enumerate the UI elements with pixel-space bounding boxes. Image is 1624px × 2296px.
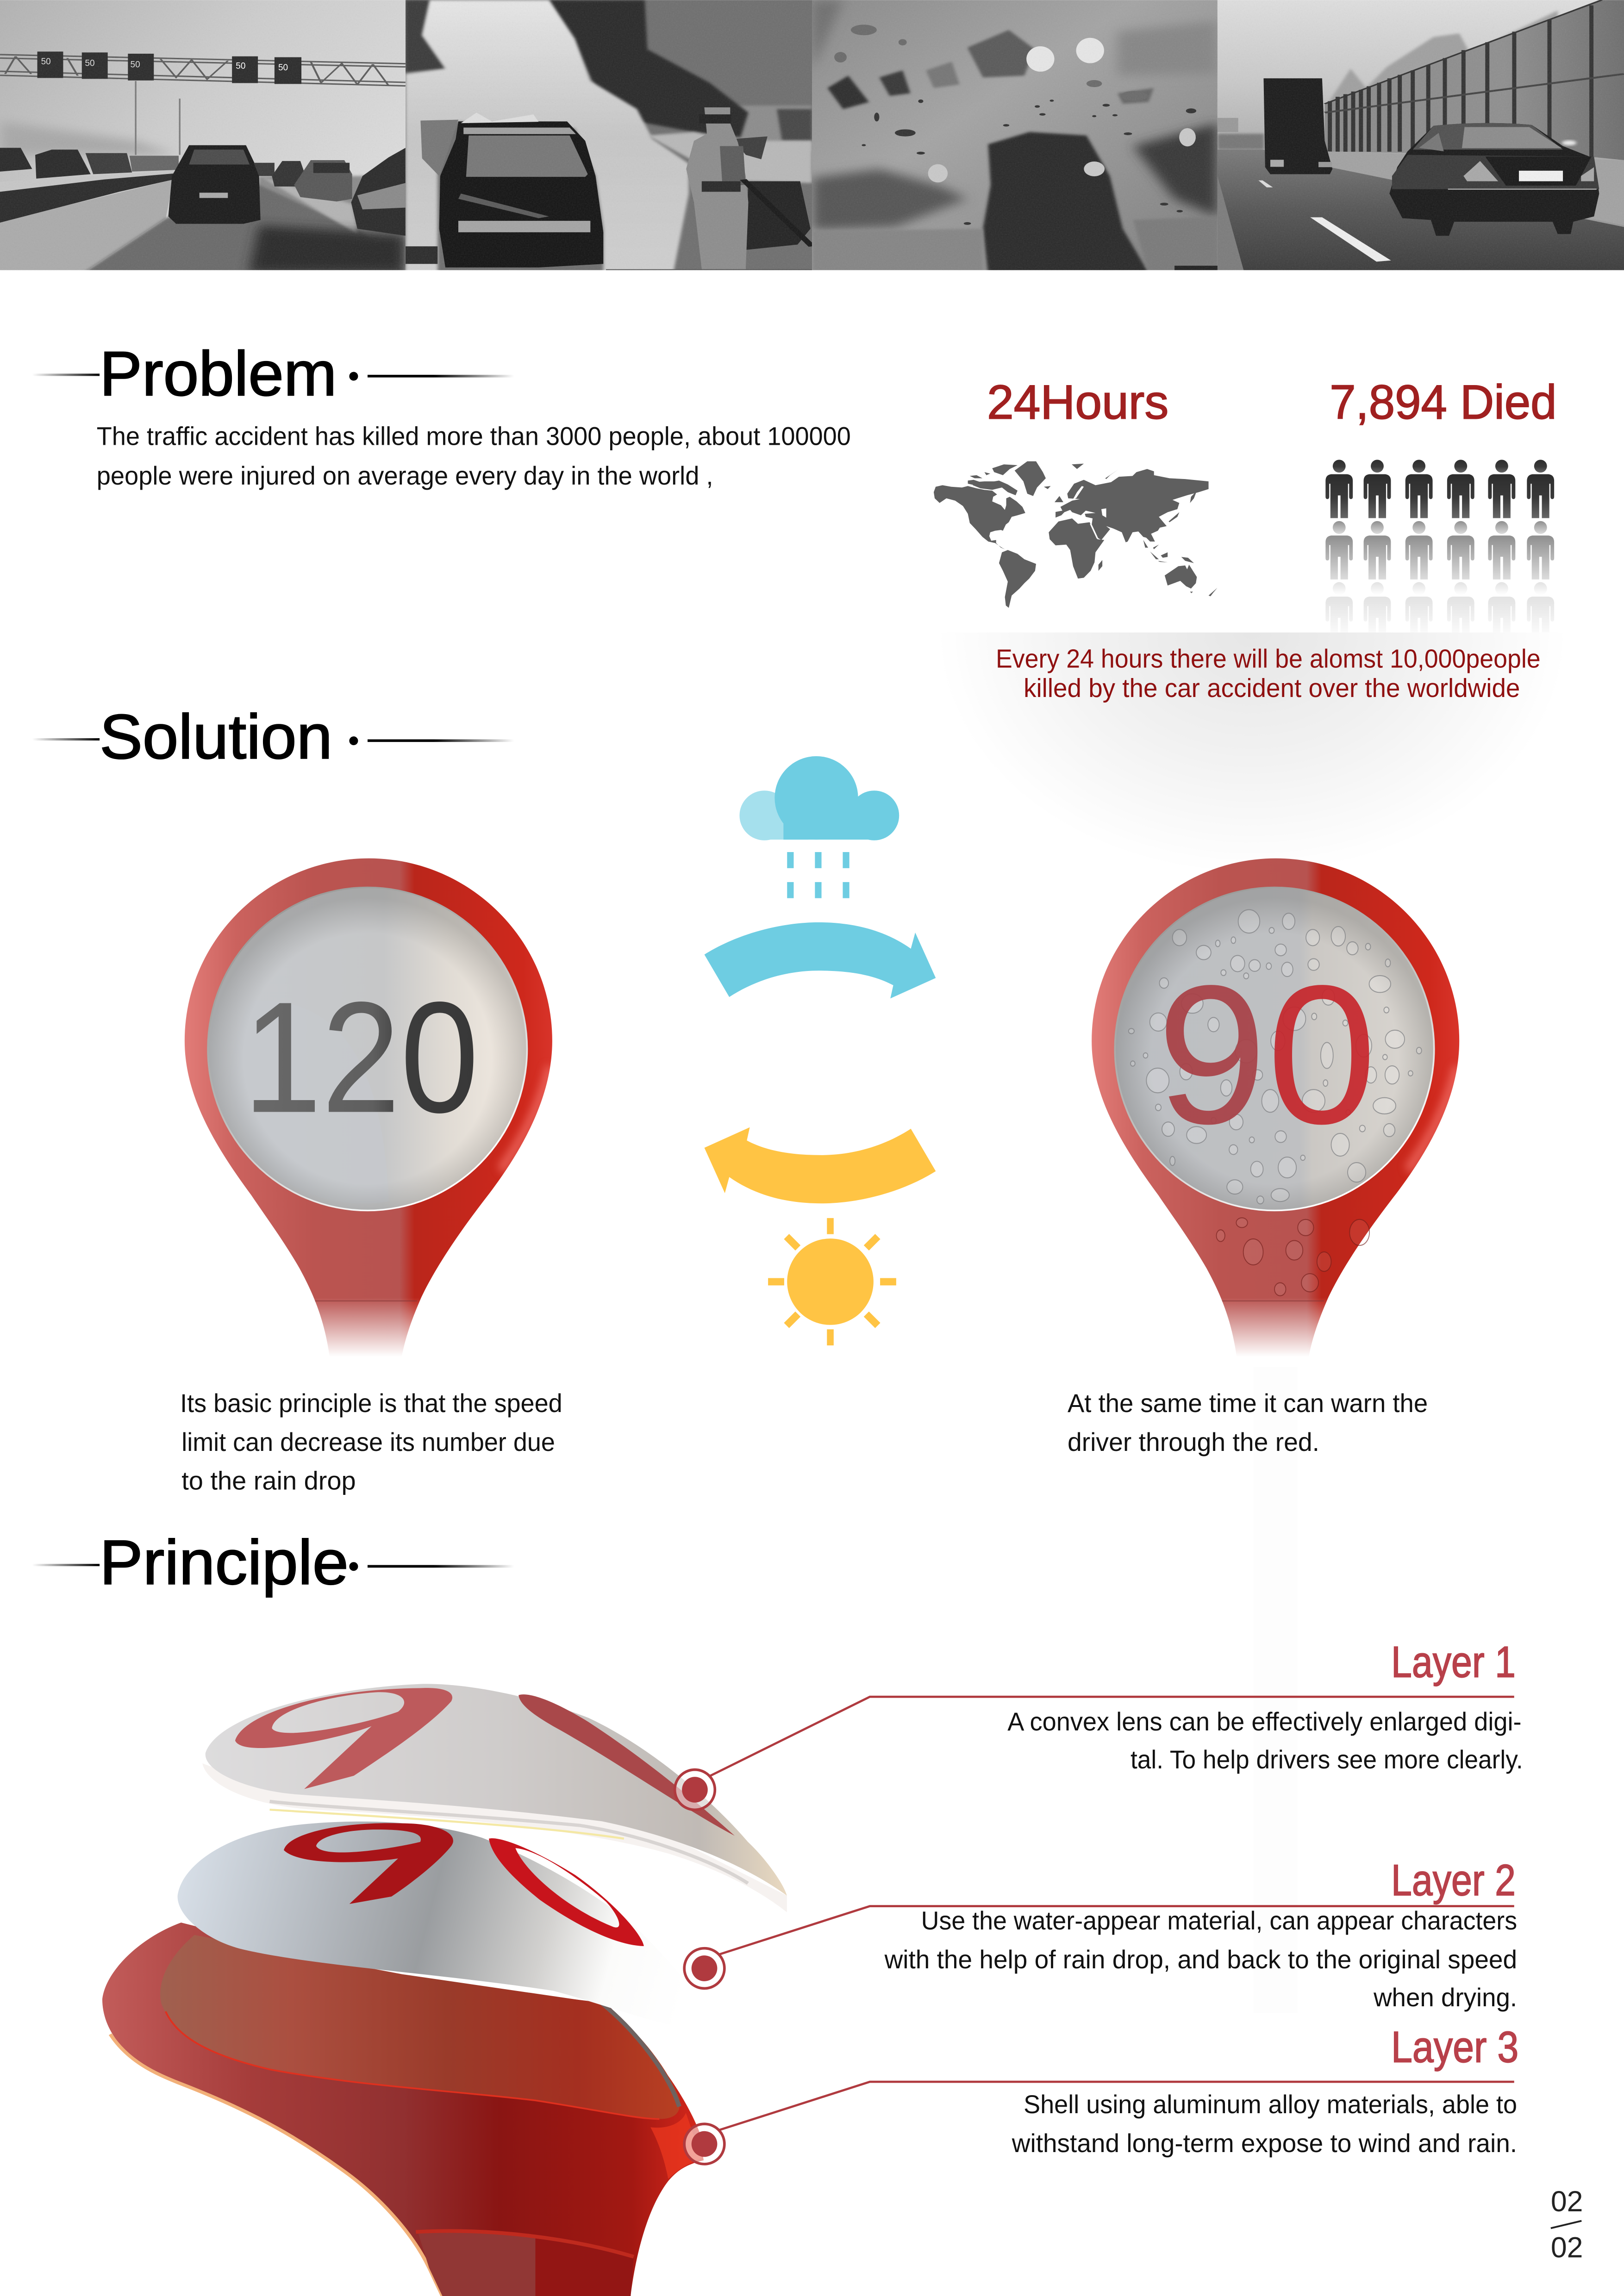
text: basic principle: Its basic principle is that the speed — [180, 1389, 562, 1418]
arrow: yellow, sun restores limit — [705, 1127, 936, 1203]
page number — [1551, 2185, 1583, 2264]
people pictogram — [1325, 460, 1554, 641]
callout: layer 3: Shell using aluminum alloy materials, able to — [1024, 2090, 1517, 2119]
gantry sign numbers: 50 — [278, 63, 288, 73]
icon: rain cloud — [739, 756, 899, 898]
callout: every 24 hours — [996, 644, 1541, 703]
gantry sign numbers: 50 — [236, 62, 245, 71]
callout: layer 2 — [684, 1856, 1517, 2012]
speed sign: 120 — [185, 859, 552, 1367]
exploded sign — [102, 1684, 787, 2296]
text: problem description: The traffic accident has killed more than 3000 people, about 100000 — [97, 422, 851, 451]
rain drops — [1129, 910, 1422, 1204]
photo strip — [0, 0, 1624, 279]
strip bottom trim — [0, 270, 1624, 279]
page number: 02 — [1551, 2185, 1583, 2218]
gantry sign numbers — [41, 57, 288, 73]
text: basic principle: limit can decrease its number due — [181, 1428, 555, 1456]
text: problem description — [97, 422, 851, 490]
heading: Principle: Principle — [100, 1527, 349, 1598]
photo: burning car and firefighter — [406, 0, 812, 273]
callout: layer 3 — [684, 2022, 1518, 2164]
text: problem description: people were injured on average every day in the world , — [97, 461, 713, 490]
photo group: rain on glass and wet road — [812, 0, 1624, 273]
stat: 7,894 Died: 7,894 Died — [1330, 376, 1556, 429]
layer 2: water-appear sheet — [178, 1822, 724, 2034]
text: warning — [1068, 1389, 1428, 1456]
gantry sign numbers: 50 — [41, 57, 51, 67]
heading: Solution — [32, 702, 514, 772]
grey shadow band — [937, 391, 1567, 874]
photo group: snowy queue and burning car — [0, 0, 812, 273]
photo: rain on windscreen — [812, 0, 1218, 273]
callout: every 24 hours: Every 24 hours there will be alomst 10,000people — [996, 644, 1541, 673]
section: problem — [32, 338, 1567, 874]
icon: sun — [768, 1218, 896, 1345]
faint pin reflection trail — [1254, 1354, 1298, 2013]
gantry sign numbers: 50 — [85, 58, 95, 68]
gantry sign numbers: 50 — [131, 60, 140, 70]
callout: layer 2: with the help of rain drop, and back to the original speed — [884, 1945, 1517, 1974]
section: solution — [32, 702, 1459, 1495]
text: warning: At the same time it can warn the — [1068, 1389, 1428, 1418]
speed sign: 90 with rain drops — [1092, 859, 1459, 1367]
arrow: blue, rain lowers limit — [705, 922, 936, 998]
photo grain — [0, 0, 1624, 270]
callout: layer 1: tal. To help drivers see more clearly. — [1131, 1745, 1523, 1774]
callout: layer 1 — [675, 1638, 1523, 1810]
heading: Problem: Problem — [100, 338, 337, 409]
photo: snowy motorway queue — [0, 0, 406, 273]
text: basic principle — [180, 1389, 562, 1495]
callout: layer 1: A convex lens can be effectively enlarged digi- — [1007, 1707, 1522, 1736]
world map — [934, 461, 1218, 608]
callout: layer 2: Use the water-appear material, can appear characters — [921, 1906, 1517, 1935]
layer 3: red shell — [102, 1923, 704, 2296]
number 120: 120 — [243, 970, 479, 1146]
callout: layer 2: Layer 2 — [1391, 1856, 1516, 1905]
heading: Problem — [32, 338, 514, 409]
callout: layer 1: Layer 1 — [1391, 1638, 1516, 1687]
number 90: 90 — [1157, 944, 1377, 1165]
callout: every 24 hours: killed by the car accident over the worldwide — [1024, 673, 1520, 703]
callout: layer 3: Layer 3 — [1391, 2022, 1518, 2072]
page number: 02 — [1551, 2232, 1583, 2264]
text: warning: driver through the red. — [1068, 1428, 1319, 1456]
drops on the red shell — [1217, 1218, 1369, 1296]
callout: layer 2: when drying. — [1373, 1983, 1517, 2012]
photo: cars on wet road — [1218, 0, 1624, 273]
callout: layer 3: withstand long-term expose to wind and rain. — [1012, 2129, 1517, 2158]
layer 1: convex lens — [202, 1684, 787, 1912]
stat: 24Hours: 24Hours — [987, 376, 1168, 429]
section: principle — [32, 1527, 1523, 2296]
heading: Solution: Solution — [100, 702, 332, 772]
text: basic principle: to the rain drop — [181, 1467, 356, 1495]
heading: Principle — [32, 1527, 514, 1598]
